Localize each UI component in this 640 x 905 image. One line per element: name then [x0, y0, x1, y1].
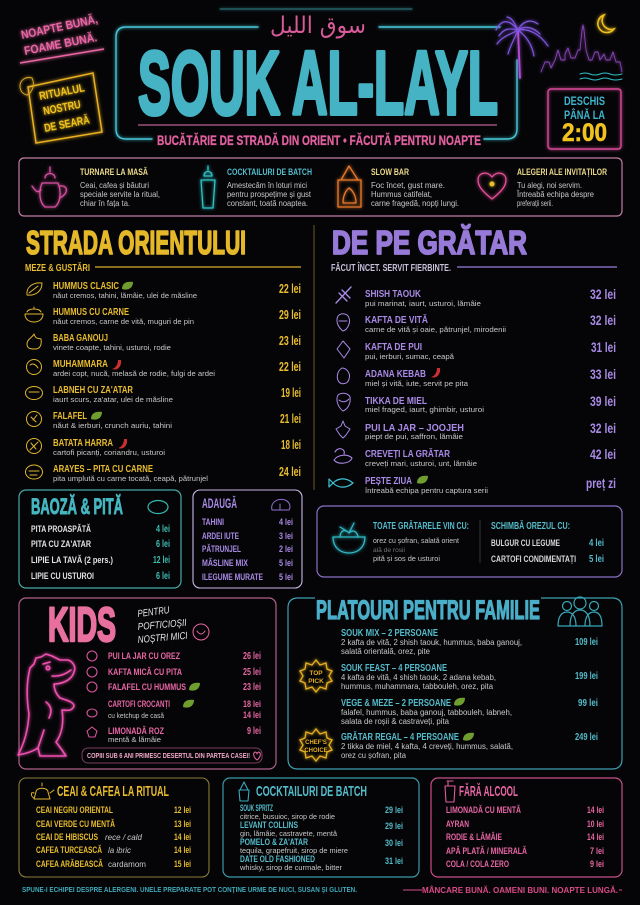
- item: tikka de miel: TIKKA DE MIEL: [365, 396, 427, 407]
- item: vege si meze: VEGE & MEZE – 2 PERSOANE: [341, 697, 451, 709]
- item: kafta mica cu pita: [87, 667, 261, 678]
- item: arayes: pita umplută cu carne tocată, ceapă, pătrunjel: [53, 474, 208, 483]
- text: schimba orezul: 5 lei: [589, 554, 604, 565]
- header frame: [116, 9, 517, 139]
- badge: ritualul nostru de seara: DE SEARĂ: [43, 113, 91, 135]
- item: limonada roz: 9 lei: [247, 726, 261, 737]
- item: hummus cu carne: năut cremos, carne de vită, muguri de pin: [53, 317, 194, 326]
- item: baba ganouj: vinete coapte, tahini, usturoi, rodie: [53, 343, 171, 352]
- item: hummus cu carne: [25, 307, 301, 326]
- item: shish taouk: SHISH TAOUK: [365, 289, 422, 300]
- item: kafta de pui: KAFTA DE PUI: [365, 342, 422, 353]
- item: baba ganouj: BABA GANOUJ: [53, 333, 108, 344]
- text: schimba orezul: CARTOFI CONDIMENTAȚI: [491, 554, 576, 565]
- feature: alegeri ale invitatilor: ALEGERI ALE INVITAȚILOR: [517, 167, 607, 177]
- panel: baoza si pita: [19, 490, 181, 588]
- text: schimba orezul: BULGUR CU LEGUME: [491, 538, 560, 549]
- tagline: BUCĂTĂRIE DE STRADĂ DIN ORIENT • FĂCUTĂ PENTRU NOAPTE: [157, 133, 481, 148]
- panel: rituals band: [19, 158, 622, 216]
- section: de pe gratar: [329, 224, 617, 495]
- feature: cocktailuri de batch: COCKTAILURI DE BATCH: [227, 167, 312, 177]
- heading: de pe gratar: DE PE GRĂTAR: [332, 224, 527, 261]
- price list: LIPIE LA TAVĂ (2 pers.): [31, 555, 113, 566]
- item: pomelo si zaatar: 30 lei: [385, 838, 403, 849]
- item: arayes: [26, 464, 301, 483]
- item: souk feast: 4 kafta de vită, 4 shish taouk, 2 adana kebab,: [341, 673, 496, 682]
- item: cartofi crocanti: CARTOFI CROCANȚI: [108, 699, 170, 710]
- item: falafel cu hummus: 23 lei: [243, 682, 261, 693]
- item: adana kebab: miel și vită, iute, servit pe pita: [365, 379, 469, 388]
- price list: AYRAN: [446, 819, 469, 829]
- item: pui la jar cu orez: [87, 651, 261, 662]
- price list: CAFEA TURCEASCĂ: [36, 845, 102, 855]
- badge: top pick: [300, 660, 332, 692]
- panel: adauga: [193, 490, 302, 588]
- price list: 4 lei: [156, 524, 170, 535]
- item: souk mix: SOUK MIX – 2 PERSOANE: [341, 627, 438, 639]
- price list: 14 lei: [174, 845, 191, 856]
- heading: baoza si pita: BAOZĂ & PITĂ: [31, 494, 123, 519]
- feature: turnare la masa: speciale servite la ritual,: [80, 190, 160, 199]
- item: limonada roz: LIMONADĂ ROZ: [108, 726, 164, 737]
- item: muhammara: [26, 359, 301, 378]
- price list: [202, 517, 293, 583]
- item: falafel: [26, 411, 301, 430]
- feature: slow bar: Hummus catifelat,: [371, 190, 432, 199]
- item: souk feast: [341, 662, 598, 691]
- item: levant collins: gin, lămâie, castravete, mentă: [240, 829, 338, 838]
- icon: cocktail shaker: [239, 782, 249, 801]
- item: pui la jar joojeh: piept de pui, saffron, lămâie: [365, 432, 463, 441]
- price list: 12 lei: [153, 555, 170, 566]
- feature: turnare la masa: chiar în fața ta.: [80, 199, 130, 208]
- section: strada orientului: [25, 224, 301, 483]
- feature: slow bar: carne fragedă, nopți lungi.: [371, 199, 459, 208]
- item: gratar regal: 2 tikka de miel, 4 kafta, 4 creveți, hummus, salată,: [341, 742, 513, 751]
- item: cartofi crocanti: cu ketchup de casă: [108, 711, 165, 720]
- icon: teapot small: [31, 783, 54, 799]
- price list: 5 lei: [279, 558, 293, 569]
- text: toate gratarele: [373, 519, 469, 563]
- badge: ritualul nostru de seara: RITUALUL: [38, 82, 86, 103]
- panel: ceai si cafea: [19, 778, 209, 877]
- price list: MĂSLINE MIX: [202, 558, 248, 568]
- heading: ceai si cafea: CEAI & CAFEA LA RITUAL: [57, 783, 169, 800]
- text: schimba orezul: SCHIMBĂ OREZUL CU:: [491, 519, 570, 532]
- badge: deschis pana la 2:00: DESCHIS: [564, 96, 605, 108]
- feature: slow bar: [371, 167, 459, 208]
- slogan: noapte buna: FOAME BUNĂ.: [23, 29, 98, 58]
- feature: alegeri ale invitatilor: [516, 167, 607, 208]
- price list: cardamom: [108, 860, 146, 869]
- price list: 4 lei: [279, 517, 293, 528]
- arabic title: سوق الليل: [270, 13, 366, 39]
- icon: waves: [580, 73, 622, 80]
- feature: alegeri ale invitatilor: Întreabă echipa despre: [516, 190, 595, 199]
- price list: 14 lei: [174, 832, 191, 843]
- badge: top pick: TOP: [309, 670, 323, 677]
- feature: slow bar: Foc încet, gust mare.: [371, 181, 445, 190]
- item: baba ganouj: 23 lei: [279, 333, 301, 348]
- price list: APĂ PLATĂ / MINERALĂ: [446, 846, 527, 856]
- price list: 14 lei: [587, 805, 604, 816]
- item: souk mix: salată orientală, orez, pite: [341, 647, 431, 656]
- price list: 2 lei: [279, 544, 293, 555]
- footer: slogan: MÂNCARE BUNĂ. OAMENI BUNI. NOAPTE LUNGĂ.: [422, 884, 618, 895]
- item: souk mix: [341, 627, 598, 656]
- item: batata harra: cartofi picanți, coriandru, usturoi: [53, 448, 165, 457]
- price list: ARDEI IUTE: [202, 531, 239, 541]
- item: vege si meze: [341, 697, 598, 726]
- item: adana kebab: ADANA KEBAB: [365, 369, 426, 380]
- price list: RODIE & LĂMÂIE: [446, 831, 502, 842]
- item: falafel: năut & ierburi, crunch auriu, tahini: [53, 421, 172, 430]
- item: cartofi crocanti: [87, 699, 261, 720]
- item: souk mix: 2 kafta de vită, 2 shish taouk, hummus, baba ganouj,: [341, 638, 522, 647]
- item: vege si meze: 99 lei: [578, 697, 598, 709]
- item: shish taouk: 32 lei: [590, 286, 616, 302]
- price list: 9 lei: [590, 859, 604, 870]
- price list: COLA / COLA ZERO: [446, 859, 509, 869]
- item: tikka de miel: [337, 393, 616, 414]
- price list: [446, 805, 604, 870]
- badge: chefs choice: CHEF'S: [305, 740, 327, 746]
- feature: alegeri ale invitatilor: preferații serii.: [517, 199, 553, 208]
- badge: chefs choice: CHOICE: [304, 748, 328, 754]
- panel: kids: [18, 598, 276, 769]
- price list: 12 lei: [174, 805, 191, 816]
- text: toate gratarele: TOATE GRĂTARELE VIN CU:: [373, 519, 469, 532]
- item: kafta mica cu pita: 25 lei: [243, 667, 261, 678]
- text: toate gratarele: pită și sos de usturoi: [373, 554, 440, 563]
- banner: desert copii: COPIII SUB 6 ANI PRIMESC DESERTUL DIN PARTEA CASEI!: [87, 753, 250, 760]
- item: peste ziua: întreabă echipa pentru captura serii: [364, 486, 488, 495]
- item: limonada roz: [87, 726, 261, 744]
- icon: moon: [598, 15, 614, 33]
- item: tikka de miel: miel fraged, iaurt, ghimbir, usturoi: [365, 405, 484, 414]
- price list: CEAI NEGRU ORIENTAL: [36, 805, 113, 815]
- price list: PĂTRUNJEL: [202, 544, 241, 554]
- feature: turnare la masa: Ceai, cafea și băuturi: [80, 181, 149, 190]
- feature: cocktailuri de batch: constant, toată noaptea.: [227, 199, 308, 208]
- item: souk feast: hummus, muhammara, tabbouleh, orez, pita: [341, 682, 494, 691]
- item: souk feast: SOUK FEAST – 4 PERSOANE: [341, 662, 447, 674]
- price list: 14 lei: [587, 832, 604, 843]
- price list: 10 lei: [587, 819, 604, 830]
- item: batata harra: 18 lei: [281, 437, 301, 452]
- price list: rece / cald: [105, 833, 143, 842]
- item: kafta mica cu pita: KAFTA MICĂ CU PITA: [108, 667, 182, 678]
- badge: ritualul nostru de seara: NOSTRU: [42, 99, 82, 118]
- item: vege si meze: salata de roșii & castraveți, pita: [341, 717, 450, 726]
- banner: desert copii: [82, 748, 262, 763]
- item: hummus cu carne: 29 lei: [279, 307, 301, 322]
- badge: deschis pana la 2:00: 2:00: [562, 119, 607, 147]
- item: date old fashioned: [239, 854, 403, 872]
- item: kafta de pui: 31 lei: [591, 339, 616, 355]
- item: labneh cu zaatar: iaurt scurs, za'atar, ulei de măsline: [53, 395, 173, 404]
- item: muhammara: 22 lei: [279, 359, 301, 374]
- badge: deschis pana la 2:00: [548, 89, 621, 149]
- icon: bowl lid: [272, 499, 290, 510]
- item: adana kebab: 33 lei: [590, 366, 616, 382]
- item: cartofi crocanti: 14 lei: [243, 710, 261, 720]
- slogan: noapte buna: [20, 11, 104, 63]
- feature: slow bar: SLOW BAR: [371, 167, 409, 177]
- item: levant collins: 29 lei: [385, 821, 403, 832]
- item: vege si meze: falafel, hummus, baba ganouj, tabbouleh, labneh,: [341, 708, 512, 717]
- feature: turnare la masa: [80, 167, 160, 208]
- subheading: meze si gustari: MEZE & GUSTĂRI: [25, 261, 90, 274]
- price list: LIMONADĂ CU MENTĂ: [446, 805, 521, 815]
- price list: 13 lei: [174, 819, 191, 830]
- item: souk feast: 199 lei: [575, 670, 598, 682]
- price list: 15 lei: [174, 859, 191, 870]
- item: tikka de miel: 39 lei: [590, 393, 616, 409]
- item: levant collins: [240, 820, 403, 838]
- item: creveti la gratar: CREVEȚI LA GRĂTAR: [365, 447, 451, 460]
- icon: smile: [193, 624, 209, 640]
- badge: top pick: PICK: [308, 678, 324, 685]
- panel: platouri pentru familie: [288, 595, 622, 769]
- item: baba ganouj: [27, 333, 301, 352]
- item: hummus clasic: 22 lei: [279, 281, 301, 296]
- item: hummus clasic: HUMMUS CLASIC: [53, 281, 119, 292]
- item: shish taouk: pui marinat, iaurt, usturoi, lămâie: [365, 299, 481, 308]
- price list: 7 lei: [590, 846, 604, 857]
- price list: 6 lei: [156, 571, 170, 582]
- item: pui la jar cu orez: 26 lei: [243, 651, 261, 662]
- feature: cocktailuri de batch: [227, 167, 312, 208]
- item: batata harra: BATATA HARRA: [53, 438, 113, 449]
- panel: garnituri gratar: [317, 506, 622, 577]
- price list: 5 lei: [279, 572, 293, 583]
- item: kafta de vita: carne de vită și oaie, pătrunjel, mirodenii: [365, 325, 506, 334]
- price list: la ibric: [108, 846, 131, 855]
- item: peste ziua: PEȘTE ZIUA: [365, 476, 412, 487]
- heading: kids: KIDS: [48, 599, 116, 652]
- item: falafel cu hummus: [87, 682, 261, 693]
- item: pomelo si zaatar: [240, 837, 403, 855]
- item: souk spritz: citrice, busuioc, sirop de rodie: [240, 812, 335, 821]
- item: labneh cu zaatar: LABNEH CU ZA'ATAR: [53, 385, 134, 396]
- price list: ILEGUME MURATE: [202, 572, 263, 582]
- item: pomelo si zaatar: POMELO & ZA'ATAR: [240, 837, 308, 847]
- item: labneh cu zaatar: [26, 385, 301, 404]
- item: gratar regal: orez cu șofran, pita: [341, 751, 407, 760]
- badge: chefs choice: [300, 729, 332, 761]
- icon: heart: [478, 173, 506, 199]
- slogan: noapte buna: NOAPTE BUNĂ,: [20, 11, 99, 42]
- price list: PITA PROASPĂTĂ: [31, 524, 91, 535]
- item: kafta de pui: pui, ierburi, sumac, ceapă: [365, 352, 455, 361]
- item: pui la jar joojeh: PUI LA JAR – JOOJEH: [365, 423, 464, 434]
- heading: strada orientului: STRADA ORIENTULUI: [26, 224, 246, 261]
- text: toate gratarele: orez cu șofran, salată orient: [373, 536, 460, 545]
- item: arayes: 24 lei: [279, 464, 301, 479]
- item: shish taouk: [336, 286, 616, 308]
- badge: deschis pana la 2:00: PÂNĂ LA: [564, 109, 605, 122]
- item: gratar regal: 249 lei: [575, 731, 598, 743]
- item: cartofi crocanti: 18 lei: [243, 699, 261, 710]
- illustration: dinosaur: [18, 654, 75, 756]
- icon: lantern: [338, 166, 361, 207]
- item: muhammara: ardei copt, nucă, melasă de rodie, fulgi de ardei: [53, 369, 215, 378]
- item: creveti la gratar: [334, 446, 616, 468]
- item: levant collins: LEVANT COLLINS: [240, 820, 298, 830]
- item: kafta de vita: 32 lei: [590, 312, 616, 328]
- item: date old fashioned: DATE OLD FASHIONED: [240, 854, 315, 864]
- item: hummus clasic: năut cremos, tahini, lămâie, ulei de măsline: [53, 291, 197, 300]
- item: creveti la gratar: 42 lei: [590, 446, 616, 462]
- item: kafta de pui: [337, 339, 616, 361]
- item: date old fashioned: whisky, sirop de curmale, bitter: [239, 863, 342, 872]
- icon: teapot: [32, 167, 66, 207]
- price list: CAFEA ARĂBEASCĂ: [36, 859, 103, 869]
- item: hummus cu carne: HUMMUS CU CARNE: [53, 307, 129, 318]
- price list: [31, 524, 170, 582]
- feature: turnare la masa: TURNARE LA MASĂ: [80, 167, 148, 177]
- icon: skyline: [541, 25, 622, 72]
- icon: palm tree: [496, 17, 548, 78]
- item: adana kebab: [337, 366, 616, 388]
- price list: TAHINI: [202, 517, 224, 527]
- item: creveti la gratar: creveți mari, usturoi, unt, lămâie: [365, 459, 477, 468]
- tagline: pentru pofticiosii nostri mici: [137, 605, 188, 646]
- item: pomelo si zaatar: tequila, grapefruit, sirop de miere: [240, 846, 348, 855]
- heading: adauga: ADAUGĂ: [202, 495, 237, 511]
- item: batata harra: [26, 437, 301, 457]
- price list: 6 lei: [156, 539, 170, 550]
- item: muhammara: MUHAMMARA: [53, 359, 108, 370]
- icon: family: [558, 597, 602, 626]
- item: falafel cu hummus: FALAFEL CU HUMMUS: [108, 682, 186, 693]
- item: hummus clasic: [27, 281, 301, 300]
- item: peste ziua: [329, 475, 616, 495]
- item: kafta de vita: KAFTA DE VITĂ: [365, 313, 428, 326]
- badge: ritualul nostru de seara: [20, 73, 102, 143]
- item: souk mix: 109 lei: [575, 636, 598, 648]
- tagline: pentru pofticiosii nostri mici: NOȘTRI MICI: [137, 631, 188, 646]
- tagline: pentru pofticiosii nostri mici: POFTICIOȘII: [137, 618, 187, 633]
- text: toate gratarele: ală de rosii: [373, 548, 405, 554]
- item: gratar regal: GRĂTAR REGAL – 4 PERSOANE: [341, 730, 459, 743]
- price list: CEAI VERDE CU MENTĂ: [36, 819, 115, 829]
- item: labneh cu zaatar: 19 lei: [281, 385, 301, 400]
- price list: 3 lei: [279, 531, 293, 542]
- item: limonada roz: mentă & lămâie: [108, 735, 161, 744]
- feature: cocktailuri de batch: Amestecăm în loturi mici: [227, 181, 307, 190]
- item: peste ziua: preț zi: [586, 475, 616, 491]
- price list: CEAI DE HIBISCUS: [36, 832, 98, 842]
- item: falafel: FALAFEL: [53, 411, 87, 422]
- item: kafta de vita: [337, 312, 616, 334]
- panel: cocktailuri de batch: [223, 778, 419, 877]
- item: date old fashioned: 31 lei: [385, 856, 403, 867]
- price list: LIPIE CU USTUROI: [31, 571, 94, 582]
- price list: [36, 805, 191, 870]
- item: souk spritz: SOUK SPRITZ: [240, 803, 273, 813]
- footer: allergens note: SPUNE-I ECHIPEI DESPRE ALERGENI. UNELE PREPARATE POT CONȚINE URME DE NUCI, SUSAN ȘI GLUTEN.: [22, 885, 357, 894]
- heading: cocktailuri: COCKTAILURI DE BATCH: [256, 783, 367, 800]
- item: souk spritz: [240, 803, 403, 821]
- subheading: facut incet: FĂCUT ÎNCET. SERVIT FIERBINTE.: [331, 261, 451, 274]
- price list: PITA CU ZA'ATAR: [31, 539, 91, 550]
- text: schimba orezul: 4 lei: [589, 538, 604, 549]
- feature: cocktailuri de batch: pentru prospețime și gust: [227, 190, 312, 199]
- heading: fara alcool: FĂRĂ ALCOOL: [459, 783, 518, 800]
- icon: salad bowl: [333, 523, 365, 553]
- item: arayes: ARAYES – PITA CU CARNE: [53, 464, 153, 475]
- text: schimba orezul: [491, 519, 604, 565]
- item: falafel: 21 lei: [280, 411, 301, 426]
- item: gratar regal: [341, 730, 598, 760]
- tagline: pentru pofticiosii nostri mici: PENTRU: [137, 605, 171, 620]
- item: pui la jar cu orez: PUI LA JAR CU OREZ: [108, 651, 180, 662]
- item: souk spritz: 29 lei: [385, 805, 403, 816]
- panel: fara alcool: [431, 778, 622, 877]
- item: pui la jar joojeh: 32 lei: [590, 420, 616, 436]
- icon: shaker: [201, 166, 215, 208]
- feature: alegeri ale invitatilor: Tu alegi, noi servim.: [517, 181, 582, 190]
- item: pui la jar joojeh: [336, 420, 616, 441]
- icon: glass: [445, 781, 455, 802]
- icon: pita: [148, 500, 168, 514]
